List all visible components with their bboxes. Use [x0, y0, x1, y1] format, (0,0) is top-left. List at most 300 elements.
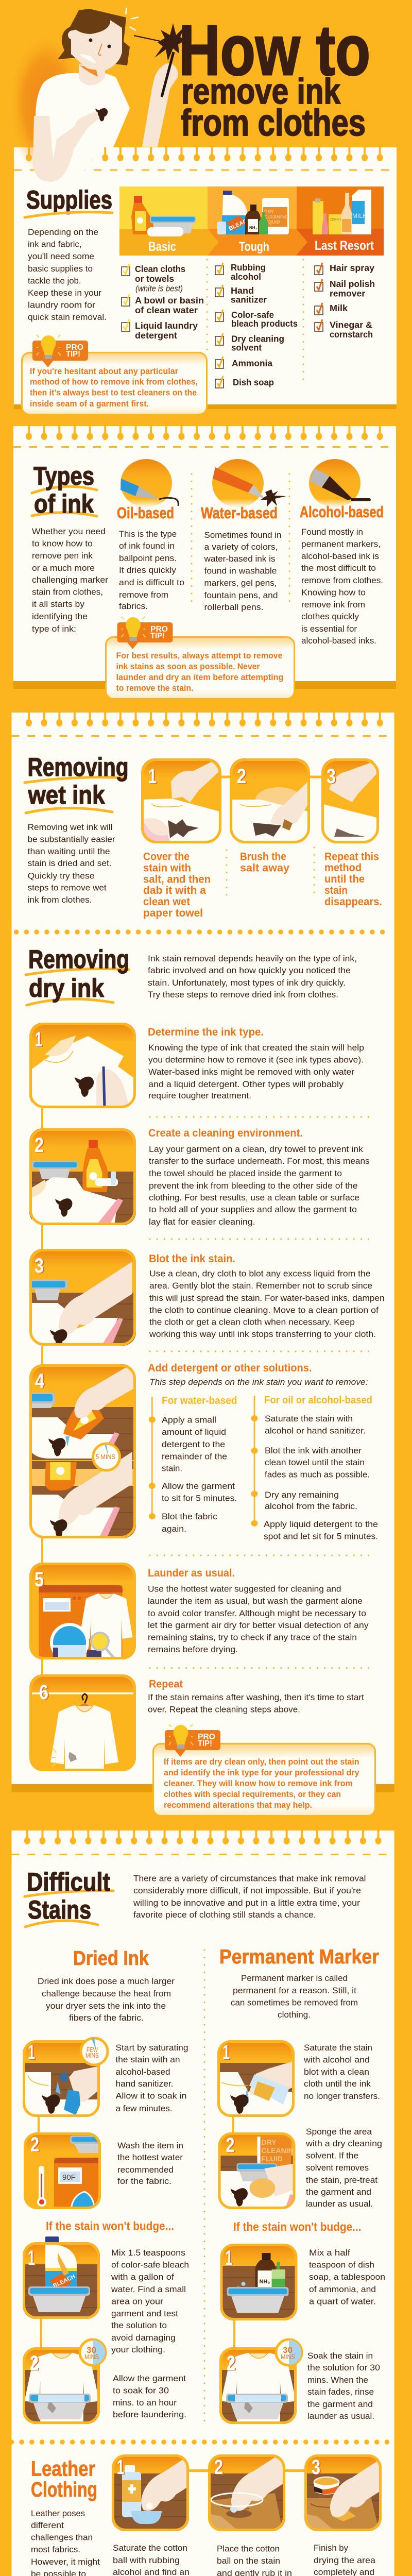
- label: pro tip: TIP!: [150, 632, 165, 640]
- text: types intro: stain from clothes,: [32, 587, 103, 597]
- caption: step 2: Brush the: [240, 851, 286, 862]
- text: dry ink intro: Try these steps to remove dried ink from clothes.: [148, 990, 338, 999]
- text: alcohol-based: remove from clothes.: [301, 575, 383, 585]
- step number: 2: [30, 2133, 39, 2156]
- step 5 text: let the garment air dry for better visual detection of any: [148, 1620, 369, 1630]
- text: dried step 1: Start by saturating: [115, 2043, 188, 2053]
- icon: pro tip badge: [117, 617, 173, 649]
- heading: removing dry ink: [26, 945, 129, 1005]
- text: oil-based: fabrics.: [119, 601, 148, 611]
- chart: supply tiers: [119, 187, 384, 256]
- text: budge left step 1: of color-safe bleach: [111, 2260, 189, 2270]
- checklist: basic: of clean water: [135, 305, 198, 315]
- text: budge left step 1: water. Find a small: [111, 2284, 186, 2294]
- step number: 2: [226, 2134, 235, 2157]
- text: budge right step 2: Soak the stain in: [307, 2351, 373, 2361]
- heading: types of ink: of ink: [34, 489, 94, 518]
- text: leather step 3: drying the area: [314, 2555, 376, 2565]
- illustration: budge left step 1: [23, 2236, 100, 2319]
- text: budge right step 1: a quart of water.: [309, 2297, 376, 2307]
- text: budge right step 1: Mix a half: [309, 2248, 350, 2258]
- checklist: tough: sanitizer: [231, 295, 267, 305]
- text: types intro: [32, 527, 108, 634]
- step number: 3: [35, 1255, 44, 1277]
- heading: dried ink: Dried Ink: [73, 1947, 149, 1970]
- illustration: permanent marker step 2: DRY: [262, 2138, 277, 2146]
- step 5 text: [148, 1567, 369, 1654]
- text: dried step 1: alcohol-based: [115, 2067, 170, 2077]
- icon: few mins timer: FEW: [87, 2046, 98, 2054]
- text: budge left step 2: mins. to an hour: [113, 2398, 177, 2408]
- text: leather intro: [30, 2509, 100, 2576]
- text: dried ink intro: your dryer sets the ink into the: [46, 2001, 166, 2011]
- text: difficult intro: considerably more difficult, if not impossible. But if you're: [133, 1886, 361, 1895]
- illustration: budge right step 2: [219, 2338, 303, 2424]
- text: permanent step 2: [305, 2127, 382, 2209]
- text: types intro: identifying the: [32, 612, 88, 621]
- text: supplies intro: [28, 227, 107, 322]
- heading: removing wet ink: Removing: [28, 753, 129, 782]
- step 3 text: [149, 1253, 385, 1339]
- text: leather step 3: [314, 2543, 376, 2576]
- step 2 text: the towel should be placed inside the garment to: [149, 1168, 342, 1178]
- step 5 text: remaining stains, try to check if any trace of the stain: [148, 1632, 357, 1642]
- text: leather step 2: ball on the stain: [217, 2556, 280, 2566]
- text: permanent step 1: Saturate the stain: [304, 2043, 372, 2053]
- step number: 1: [222, 2041, 230, 2064]
- list: oil or alcohol-based: Apply liquid detergent to the: [264, 1519, 378, 1529]
- text: water-based: Sometimes found in: [204, 530, 281, 540]
- text: types intro: remove pen ink: [32, 551, 93, 561]
- text: budge right step 2: launder as usual.: [307, 2411, 374, 2421]
- callout: pro tip 2: to remove the stain.: [116, 684, 194, 693]
- checklist: tough: Color-safe: [231, 310, 274, 320]
- checklist: tough: bleach products: [231, 318, 298, 329]
- checklist: basic: detergent: [135, 330, 177, 341]
- text: budge left step 2: to soak for 30: [113, 2386, 169, 2396]
- checklist: tough: alcohol: [231, 272, 261, 282]
- checklist: last resort: cornstarch: [330, 329, 373, 340]
- list: water-based: to sit for 5 minutes.: [162, 1494, 237, 1503]
- checklist: last resort: Hair spray: [330, 263, 374, 273]
- text: permanent step 1: no longer transfers.: [304, 2091, 380, 2101]
- illustration: stained woman: [8, 8, 186, 182]
- step 5 text: Use the hottest water suggested for cleaning and: [148, 1584, 341, 1594]
- icons: tough supplies: DRY: [264, 209, 274, 214]
- icons: tough supplies: LIQUID: [264, 219, 280, 225]
- text: alcohol-based: Knowing how to: [301, 588, 366, 598]
- text: water-based: [203, 530, 281, 612]
- text: difficult intro: There are a variety of circumstances that make ink removal: [133, 1874, 366, 1884]
- step 3 text: this will just spread the stain. For water-based inks, dampen: [149, 1293, 385, 1303]
- text: leather intro: different: [31, 2520, 64, 2530]
- heading: leather clothing: [31, 2456, 97, 2501]
- callout: pro tip 1: then it's always best to test cleaners on the: [30, 388, 197, 398]
- caption: step 2: [240, 851, 289, 874]
- step number: 2: [30, 2352, 39, 2375]
- step 2 text: lay flat for easier cleaning.: [149, 1217, 255, 1227]
- panel: removing wet and dry ink: [11, 713, 394, 1816]
- callout: pro tip 3: If items are dry clean only, then point out the stain: [164, 1757, 359, 1767]
- text: permanent step 2: solvent. If the: [306, 2151, 358, 2161]
- text: dry ink intro: [148, 954, 357, 999]
- heading: removing dry ink: Removing: [28, 945, 129, 974]
- heading: difficult stains: Stains: [28, 1895, 91, 1924]
- callout: pro tip 2: [106, 617, 295, 699]
- list: oil or alcohol-based: [251, 1395, 378, 1541]
- step 1 text: require tougher treatment.: [148, 1091, 251, 1100]
- heading: removing wet ink: [25, 753, 129, 813]
- icon: 5 minute timer: [93, 1444, 119, 1470]
- text: wet ink intro: [28, 822, 115, 905]
- icon: pro tip badge: [32, 335, 88, 367]
- illustration: wet step 1: [141, 758, 221, 843]
- icon: 5 minute timer: 5 MINS: [96, 1453, 115, 1461]
- step number: 5: [35, 1568, 44, 1591]
- step 4 text: This step depends on the ink stain you want to remove:: [149, 1377, 368, 1387]
- illustration: step 5 launder: [29, 1563, 136, 1666]
- text: leather step 3: Finish by: [314, 2543, 349, 2553]
- list: water-based: again.: [162, 1524, 186, 1534]
- heading: removing wet ink: wet ink: [28, 781, 105, 809]
- checklist: basic: (white is best): [135, 283, 183, 294]
- heading: types of ink: Types: [33, 462, 94, 490]
- step 1 text: Determine the ink type.: [148, 1026, 264, 1038]
- label: pro tip: PRO: [66, 343, 83, 352]
- icons: basic supplies: [131, 196, 196, 236]
- text: permanent marker intro: [231, 1973, 358, 2020]
- checklist: tough: Ammonia: [232, 358, 272, 368]
- heading: difficult stains: Difficult: [27, 1868, 110, 1896]
- label: pro tip: [198, 1733, 215, 1748]
- text: budge left step 1: Mix 1.5 teaspoons: [111, 2248, 185, 2258]
- label: pro tip: PRO: [150, 625, 168, 634]
- panel: supplies: [14, 147, 397, 414]
- step 3 text: the cloth or get a clean cloth when necessary. Keep: [149, 1317, 355, 1327]
- step 2 text: [148, 1127, 370, 1227]
- text: supplies intro: ink and fabric,: [28, 240, 81, 249]
- text: oil-based: This is the type: [119, 529, 177, 539]
- illustration: wet step 2: [230, 758, 310, 843]
- caption: step 1: clean wet: [143, 896, 190, 908]
- list: oil or alcohol-based: fades as much as possible.: [265, 1469, 370, 1480]
- illustration: permanent marker step 2: FLUID: [262, 2155, 283, 2163]
- label: pro tip: [66, 343, 83, 359]
- text: permanent marker intro: permanent for a reason. Still, it: [233, 1986, 356, 1995]
- label: oil-based: Oil-based: [117, 504, 174, 522]
- text: supplies intro: tackle the job.: [28, 276, 81, 285]
- label: last resort: Last Resort: [315, 239, 374, 253]
- text: types intro: to know how to: [32, 539, 93, 549]
- caption: step 1: stain with: [143, 862, 191, 874]
- icon: 30 mins timer: [276, 2340, 302, 2365]
- subheading: left if stain won't budge: If the stain won't budge...: [46, 2219, 174, 2233]
- list: oil or alcohol-based: spot and let sit for 5 minutes.: [264, 1531, 378, 1541]
- text: leather step 1: Saturate the cotton: [113, 2543, 187, 2553]
- text: dry ink intro: Ink stain removal depends heavily on the type of ink,: [148, 954, 357, 963]
- text: leather step 1: [113, 2543, 196, 2576]
- title: [179, 11, 370, 144]
- text: dried step 2: the hottest water: [117, 2153, 183, 2162]
- step 6 text: over. Repeat the cleaning steps above.: [148, 1705, 300, 1715]
- heading: leather clothing: Leather: [31, 2456, 95, 2480]
- illustration: leather step 1: [112, 2454, 189, 2531]
- step 2 text: transfer to the surface underneath. For most, this means: [149, 1156, 370, 1166]
- caption: step 1: paper towel: [143, 907, 203, 919]
- checklist: last resort: Nail polish: [330, 279, 375, 289]
- illustration: dried ink step 2: 90F: [62, 2173, 76, 2182]
- text: budge right step 2: stain fades, rinse: [307, 2387, 374, 2397]
- text: leather step 2: Place the cotton: [217, 2544, 280, 2554]
- step 1 text: Water-based inks might be removed with only water: [148, 1067, 354, 1077]
- label: pro tip: TIP!: [66, 350, 80, 359]
- icon: 30 mins timer: MINS: [281, 2353, 295, 2361]
- illustration: permanent marker step 2: CLEANING: [262, 2146, 299, 2155]
- checklist: tough: Dish soap: [233, 377, 274, 387]
- list: water-based: remainder of the: [162, 1452, 227, 1462]
- text: dried step 2: recommended: [117, 2165, 174, 2175]
- caption: step 1: Cover the: [143, 851, 190, 862]
- step 1 text: Knowing the type of ink that created the stain will help: [148, 1043, 364, 1053]
- illustration: step 4 detergent: [29, 1364, 136, 1538]
- text: permanent step 2: launder as usual.: [306, 2199, 373, 2209]
- caption: step 1: salt, and then: [143, 873, 211, 885]
- callout: pro tip 3: recommend alterations that may help.: [164, 1801, 312, 1810]
- callout: pro tip 3: clothes with special requirements, or they can: [164, 1790, 341, 1799]
- text: types intro: or a much more: [32, 563, 95, 573]
- icons: tough supplies: [217, 191, 289, 234]
- callout: pro tip 1: [22, 335, 207, 414]
- list: water-based: Allow the garment: [162, 1481, 235, 1491]
- text: dry ink intro: stain. Unfortunately, most types of ink dry quickly.: [148, 978, 346, 988]
- text: permanent step 1: cloth until the ink: [304, 2079, 371, 2089]
- text: wet ink intro: stain is dried and set.: [28, 858, 112, 868]
- text: budge right step 2: the solution for 30: [307, 2363, 380, 2372]
- text: dried step 2: Wash the item in: [117, 2141, 183, 2150]
- step 5 text: to avoid color transfer. Although might be necessary to: [148, 1608, 366, 1618]
- text: water-based: water-based ink is: [203, 554, 275, 564]
- text: oil-based: [119, 529, 184, 611]
- list: oil or alcohol-based: alcohol from the fabric.: [265, 1501, 357, 1511]
- text: difficult intro: [133, 1874, 366, 1920]
- text: wet ink intro: Quickly try these: [28, 871, 95, 881]
- caption: step 2: salt away: [240, 862, 289, 874]
- text: dried step 2: [117, 2141, 183, 2186]
- illustration: leather step 3: [304, 2454, 382, 2531]
- text: permanent marker intro: clothing.: [278, 2010, 311, 2020]
- text: budge right step 1: soap, a tablespoon: [309, 2272, 385, 2282]
- callout: pro tip 3: [153, 1724, 375, 1816]
- heading: types of ink: [32, 462, 97, 518]
- icon: fountain pen: [212, 459, 286, 507]
- text: permanent step 2: with a dry cleaning: [305, 2139, 382, 2148]
- checklist: tough: Dry cleaning: [231, 334, 284, 344]
- text: alcohol-based: alcohol-based inks.: [301, 636, 376, 646]
- caption: step 3: disappears.: [324, 896, 382, 908]
- text: water-based: fountain pens, and: [204, 590, 278, 600]
- list: oil or alcohol-based: For oil or alcohol-based: [264, 1395, 372, 1406]
- text: dried step 1: the stain with an: [115, 2055, 180, 2064]
- icon: 30 mins timer: MINS: [84, 2353, 99, 2361]
- list: water-based: stain.: [162, 1464, 182, 1473]
- icon: 30 mins timer: 30: [87, 2345, 96, 2355]
- list: oil or alcohol-based: Saturate the stain with: [265, 1414, 353, 1423]
- text: permanent step 2: the stain, pre-treat: [306, 2175, 377, 2185]
- list: oil or alcohol-based: clean towel until the stain: [265, 1458, 365, 1467]
- step number: 1: [117, 2456, 124, 2479]
- text: oil-based: of ink found in: [119, 541, 175, 551]
- icon: 30 mins timer: 30: [283, 2345, 293, 2355]
- step 5 text: launder the item as usual, but wash the garment alone: [148, 1596, 363, 1606]
- caption: step 3: until the: [324, 873, 365, 885]
- caption: step 1: dab it with a: [143, 885, 206, 896]
- text: dried step 1: a few minutes.: [115, 2104, 172, 2113]
- callout: pro tip 2: For best results, always attempt to remove: [116, 651, 282, 660]
- checklist: last resort: remover: [330, 289, 365, 299]
- icons: last resort supplies: MILK: [352, 212, 367, 219]
- caption: step 3: [324, 851, 382, 908]
- text: supplies intro: quick stain removal.: [28, 312, 107, 322]
- step 2 text: Lay your garment on a clean, dry towel to prevent ink: [149, 1144, 364, 1154]
- step number: 1: [28, 2247, 35, 2269]
- text: budge right step 1: [309, 2248, 385, 2307]
- text: alcohol-based: Found mostly in: [301, 527, 363, 537]
- text: water-based: found in washable: [204, 566, 277, 576]
- icons: tough supplies: CLEANING: [264, 214, 288, 219]
- step number: 4: [35, 1370, 45, 1393]
- text: budge right step 2: mins. When the: [307, 2375, 368, 2385]
- text: budge right step 1: teaspoon of dish: [309, 2260, 374, 2270]
- text: alcohol-based: is essential for: [301, 624, 357, 634]
- list: water-based: Apply a small: [162, 1415, 216, 1425]
- illustration: step 2 cleaning environment: [29, 1128, 138, 1233]
- label: pro tip: [150, 625, 168, 640]
- checklist: tough: [215, 262, 298, 388]
- step 5 text: remains before drying.: [148, 1645, 238, 1654]
- heading: difficult stains: [25, 1868, 113, 1927]
- text: dry ink intro: fabric involved and on how quickly you noticed the: [148, 965, 351, 975]
- checklist: last resort: Milk: [330, 303, 348, 313]
- callout: pro tip 3: cleaner. They will know how to remove ink from: [164, 1779, 353, 1788]
- text: budge left step 1: garment and test: [111, 2309, 178, 2318]
- text: leather step 1: ball with rubbing: [113, 2555, 180, 2565]
- text: water-based: a variety of colors,: [204, 542, 278, 552]
- list: oil or alcohol-based: Blot the ink with another: [265, 1446, 362, 1455]
- step 3 text: working this way until ink stops transferring to your cloth.: [149, 1329, 376, 1339]
- text: budge right step 2: [307, 2351, 380, 2421]
- checklist: basic: A bowl or basin: [135, 295, 204, 306]
- icon: marker: [309, 459, 369, 507]
- step 6 text: If the stain remains after washing, then it's time to start: [148, 1692, 364, 1702]
- step 3 text: Blot the ink stain.: [149, 1253, 235, 1265]
- text: oil-based: It dries quickly: [119, 565, 177, 575]
- text: types intro: type of ink:: [32, 624, 76, 634]
- text: permanent step 1: with alcohol and: [303, 2055, 370, 2065]
- illustration: budge right step 1: NH₃: [260, 2279, 270, 2285]
- label: pro tip: PRO: [198, 1733, 215, 1741]
- text: dried step 1: hand sanitizer.: [115, 2079, 173, 2089]
- checklist: tough: Rubbing: [231, 262, 266, 273]
- text: alcohol-based: remove ink from: [301, 600, 365, 609]
- step 1 text: you determine how to remove it (see ink types above).: [148, 1055, 364, 1065]
- step 2 text: clothing. For best results, use a clean table or surface: [149, 1193, 359, 1202]
- text: types intro: it all starts by: [32, 599, 85, 609]
- step 3 text: the cloth to continue cleaning. Move to a clean portion of: [149, 1306, 379, 1315]
- text: dried ink intro: fibers of the fabric.: [69, 2013, 144, 2023]
- text: oil-based: ballpoint pens.: [119, 553, 177, 563]
- text: oil-based: and is difficult to: [119, 578, 184, 587]
- heading: permanent marker: Permanent Marker: [219, 1946, 379, 1968]
- step number: 2: [227, 2352, 235, 2375]
- text: leather intro: Leather poses: [31, 2509, 85, 2518]
- text: permanent step 1: blot with a clean: [304, 2067, 369, 2077]
- text: oil-based: remove from: [119, 590, 168, 600]
- callout: pro tip 2: launder and dry an item before attempting: [116, 673, 283, 682]
- checklist: basic: Liquid laundry: [135, 320, 198, 331]
- icons: last resort supplies: CORN STARCH: [330, 218, 352, 222]
- text: dried ink intro: challenge because the heat from: [42, 1989, 171, 1998]
- icon: few mins timer: MINS: [85, 2052, 99, 2059]
- title: from clothes: [181, 103, 366, 144]
- text: wet ink intro: ink from clothes.: [28, 895, 92, 905]
- illustration: budge left step 2: [23, 2338, 107, 2424]
- text: budge left step 1: the solution to: [111, 2320, 167, 2330]
- text: wet ink intro: be substantially easier: [28, 835, 115, 844]
- text: water-based: markers, gel pens,: [204, 578, 277, 588]
- step 4 text: Add detergent or other solutions.: [148, 1362, 312, 1374]
- caption: step 3: Repeat this: [324, 851, 379, 862]
- step 6 text: Repeat: [149, 1679, 183, 1690]
- illustration: permanent marker step 2: [218, 2132, 296, 2209]
- checklist: last resort: Vinegar &: [330, 319, 372, 330]
- step number: 1: [28, 2041, 35, 2064]
- text: alcohol-based: clothes quickly: [301, 612, 359, 621]
- text: alcohol-based: permanent markers,: [301, 539, 381, 549]
- illustration: step 3 blot: [29, 1249, 136, 1346]
- step 3 text: area. Gently blot the stain. Remember not to scrub since: [149, 1281, 372, 1291]
- list: water-based: Blot the fabric: [162, 1512, 217, 1521]
- checklist: basic: [122, 264, 204, 341]
- text: wet ink intro: than waiting until the: [28, 846, 110, 856]
- icon: ballpoint pen: [121, 459, 178, 507]
- callout: pro tip 3: and identify the ink type for your professional dry: [164, 1768, 359, 1777]
- icons: tough supplies: BLEACH: [228, 216, 252, 232]
- step number: 2: [214, 2456, 223, 2479]
- title: How to: [179, 11, 370, 90]
- list: water-based: amount of liquid: [162, 1427, 226, 1437]
- step 6 text: [148, 1679, 364, 1715]
- text: budge right step 2: the garment and: [307, 2399, 373, 2409]
- checklist: last resort: [315, 263, 375, 340]
- text: dried ink intro: Dried ink does pose a much larger: [38, 1976, 175, 1986]
- icon: pro tip badge: [165, 1724, 220, 1757]
- text: budge left step 1: with a gallon of: [111, 2272, 174, 2282]
- text: alcohol-based: alcohol-based ink is: [301, 551, 379, 561]
- text: alcohol-based: [301, 527, 383, 646]
- text: budge left step 1: your clothing.: [111, 2345, 165, 2354]
- text: wet ink intro: Removing wet ink will: [28, 822, 113, 832]
- illustration: budge left step 1: BLEACH: [52, 2274, 76, 2289]
- text: budge left step 1: area on your: [111, 2297, 163, 2307]
- label: water-based: Water-based: [201, 504, 278, 522]
- text: difficult intro: willing to be innovative and put in a little extra time, your: [133, 1898, 360, 1908]
- subheading: right if stain won't budge: If the stain won't budge...: [233, 2220, 362, 2233]
- callout: pro tip 1: method of how to remove ink from clothes,: [30, 377, 198, 386]
- label: alcohol-based: Alcohol-based: [300, 503, 384, 521]
- illustration: budge right step 1: [220, 2244, 298, 2320]
- text: alcohol-based: the most difficult to: [301, 563, 376, 573]
- text: leather intro: However, it might: [31, 2557, 100, 2567]
